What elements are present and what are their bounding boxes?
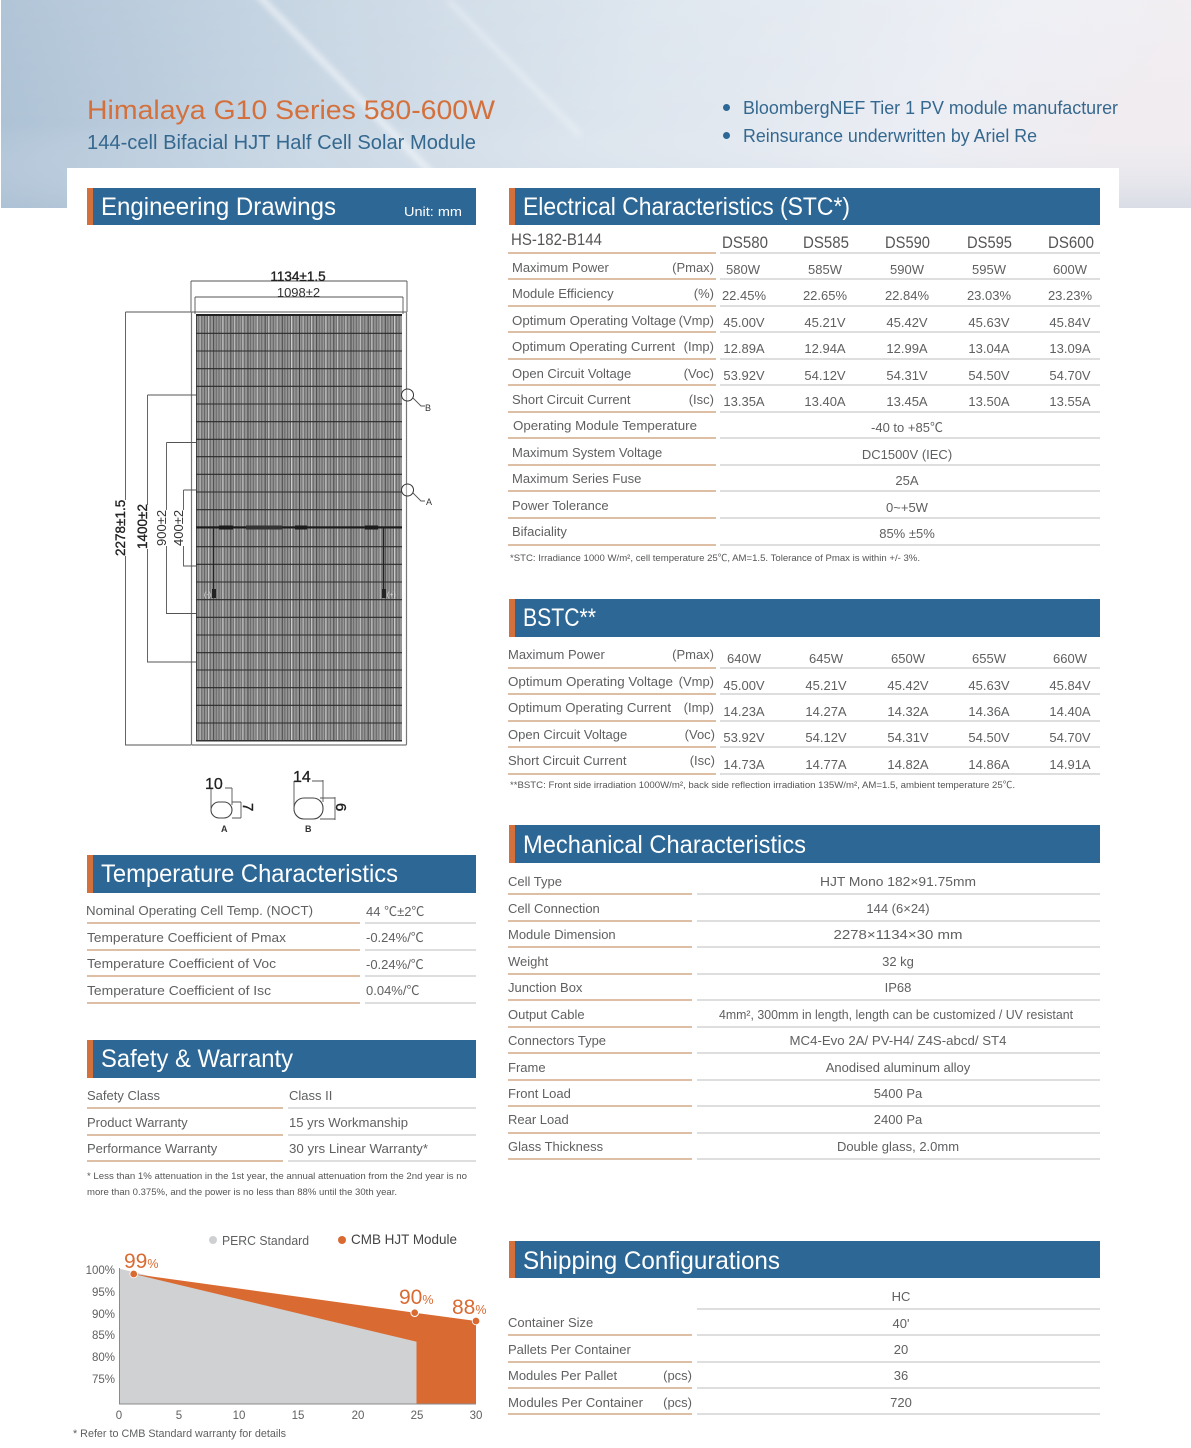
mechanical table — [508, 874, 1100, 1159]
BSTC table: 14.23A — [723, 704, 765, 719]
callouts A and B: A — [426, 497, 432, 507]
drawing: solar module front view — [113, 269, 432, 745]
STC table: 13.04A — [968, 341, 1010, 356]
STC table: 12.99A — [886, 341, 928, 356]
mechanical table: MC4-Evo 2A/ PV-H4/ Z4S-abcd/ ST4 — [790, 1033, 1006, 1048]
chart legend — [209, 1231, 457, 1248]
STC table: 12.89A — [723, 341, 765, 356]
shipping table: 40' — [893, 1316, 909, 1331]
subtitle: 144-cell Bifacial HJT Half Cell Solar Module — [87, 132, 476, 154]
STC table: Maximum System Voltage — [512, 445, 662, 460]
BSTC table: 14.32A — [887, 704, 929, 719]
BSTC table: 45.21V — [805, 678, 847, 693]
STC table: (Imp) — [684, 339, 714, 354]
y axis labels: 75% — [92, 1374, 115, 1386]
dimension: heights: 1400±2 — [135, 504, 150, 549]
panel: mechanical characteristics — [508, 825, 1100, 1159]
STC table: Optimum Operating Voltage — [512, 313, 676, 328]
highlights bullet list: BloombergNEF Tier 1 PV module manufacturer — [743, 98, 1118, 118]
mechanical table: Glass Thickness — [508, 1139, 604, 1154]
BSTC table: 655W — [972, 651, 1007, 666]
BSTC table: 45.00V — [723, 678, 765, 693]
BSTC table: (Voc) — [685, 727, 715, 742]
temperature table: Temperature Coefficient of Voc — [87, 956, 277, 971]
STC table: (%) — [694, 286, 714, 301]
warranty table — [87, 1088, 476, 1161]
STC table: 54.70V — [1049, 368, 1091, 383]
dimension: widths — [191, 269, 407, 314]
temperature table: Temperature Coefficient of Isc — [87, 983, 272, 998]
STC table: 13.35A — [723, 394, 765, 409]
STC table: DC1500V (IEC) — [862, 447, 952, 462]
mechanical table: Cell Connection — [508, 901, 600, 916]
BSTC table: 14.77A — [805, 757, 847, 772]
model header row: HS-182-B144 — [511, 230, 602, 249]
mechanical table: HJT Mono 182×91.75mm — [820, 874, 976, 889]
data point: 99%: 99% — [124, 1250, 158, 1273]
STC table: 53.92V — [723, 368, 765, 383]
model header row: DS590 — [885, 233, 930, 252]
mechanical table: IP68 — [885, 980, 911, 995]
dimension: heights — [113, 312, 196, 745]
BSTC table: 645W — [809, 651, 844, 666]
heading: mechanical characteristics: Mechanical Characteristics — [523, 831, 806, 859]
area: PERC standard — [120, 1269, 416, 1404]
STC table: 13.55A — [1049, 394, 1091, 409]
drawing: mounting hole detail A: 10 — [205, 776, 223, 793]
shipping table: Pallets Per Container — [508, 1342, 632, 1357]
mechanical table: 2400 Pa — [874, 1112, 923, 1127]
temperature table — [86, 903, 476, 1003]
data point: 88%: 88% — [452, 1296, 486, 1319]
warranty footnote — [87, 1171, 467, 1198]
BSTC table: Maximum Power — [508, 647, 605, 662]
STC table: -40 to +85℃ — [871, 420, 943, 435]
warranty table: Safety Class — [87, 1088, 160, 1103]
dimension: heights: 900±2 — [154, 510, 169, 546]
x axis labels: 30 — [470, 1410, 482, 1422]
mechanical table: 32 kg — [882, 954, 914, 969]
title: Himalaya G10 Series 580-600W — [87, 95, 496, 125]
STC table: 0~+5W — [886, 500, 929, 515]
panel: engineering drawings — [87, 188, 476, 834]
STC table: (Isc) — [689, 392, 714, 407]
callouts A and B — [402, 389, 432, 507]
drawing: mounting hole detail B: 6 — [332, 803, 349, 811]
STC table: 13.40A — [804, 394, 846, 409]
BSTC table: Short Circuit Current — [508, 753, 627, 768]
shipping table: Modules Per Pallet — [508, 1368, 617, 1383]
dimension: heights: 400±2 — [171, 510, 186, 546]
chart: warranty degradation — [73, 1231, 486, 1440]
heading: shipping configurations — [509, 1241, 1100, 1278]
BSTC table: (Pmax) — [672, 647, 714, 662]
drawing: mounting hole detail B — [293, 769, 349, 834]
dimension: heights: 2278±1.5 — [113, 500, 128, 556]
STC table: 45.63V — [968, 315, 1010, 330]
BSTC table: Optimum Operating Current — [508, 700, 671, 715]
STC table: 600W — [1053, 262, 1088, 277]
STC table: 12.94A — [804, 341, 846, 356]
heading: mechanical characteristics — [509, 825, 1100, 863]
drawing: mounting hole detail A: A — [221, 824, 228, 834]
temperature table: 0.04%/℃ — [366, 983, 419, 998]
drawing: mounting hole detail B: B — [305, 824, 312, 834]
STC table: 13.50A — [968, 394, 1010, 409]
shipping table: Modules Per Container — [508, 1395, 644, 1410]
heading: engineering drawings: Engineering Drawings — [101, 193, 336, 221]
x axis labels: 15 — [292, 1410, 304, 1422]
STC table: Maximum Series Fuse — [512, 471, 641, 486]
warranty table: Class II — [289, 1088, 332, 1103]
heading: electrical characteristics — [509, 188, 1100, 225]
warranty table: Product Warranty — [87, 1115, 188, 1130]
STC table: Bifaciality — [512, 524, 567, 539]
warranty table: Performance Warranty — [87, 1141, 218, 1156]
x axis labels: 25 — [411, 1410, 423, 1422]
STC table: (Pmax) — [672, 260, 714, 275]
BSTC table: 45.42V — [887, 678, 929, 693]
x axis labels: 20 — [352, 1410, 364, 1422]
mechanical table: 5400 Pa — [874, 1086, 923, 1101]
heading: safety and warranty — [87, 1040, 476, 1078]
BSTC table: 54.70V — [1049, 730, 1091, 745]
warranty table: 30 yrs Linear Warranty* — [289, 1141, 428, 1156]
panel: shipping configurations — [508, 1241, 1100, 1414]
area: CMB HJT module — [134, 1274, 476, 1404]
STC table: 590W — [890, 262, 925, 277]
drawing: mounting hole detail A: 7 — [239, 803, 256, 811]
BSTC table: 45.63V — [968, 678, 1010, 693]
STC table: 580W — [726, 262, 761, 277]
mechanical table: Rear Load — [508, 1112, 569, 1127]
chart axes — [120, 1268, 476, 1404]
model header row: DS585 — [803, 233, 849, 252]
shipping table: Container Size — [508, 1315, 593, 1330]
STC table: 25A — [895, 473, 919, 488]
STC table: 85% ±5% — [879, 526, 935, 541]
y axis labels: 85% — [92, 1330, 115, 1342]
STC table: Operating Module Temperature — [513, 418, 697, 433]
STC table: 45.21V — [804, 315, 846, 330]
header background — [1, 0, 1191, 209]
panel: safety and warranty — [87, 1040, 476, 1198]
BSTC table: 54.31V — [887, 730, 929, 745]
drawing: solar module front view: (-) — [204, 592, 211, 599]
drawing: mounting hole detail B: 14 — [293, 769, 311, 786]
shipping table: 720 — [890, 1395, 912, 1410]
BSTC table: 14.91A — [1049, 757, 1091, 772]
heading: BSTC: BSTC** — [523, 604, 596, 632]
heading: shipping configurations: Shipping Configurations — [523, 1247, 780, 1275]
mechanical table: Cell Type — [508, 874, 562, 889]
heading: temperature characteristics: Temperature Characteristics — [101, 860, 398, 888]
STC table: 22.84% — [885, 288, 929, 303]
mechanical table: Double glass, 2.0mm — [837, 1139, 959, 1154]
STC table: 45.84V — [1049, 315, 1091, 330]
BSTC table: 54.50V — [968, 730, 1010, 745]
mechanical table: 4mm², 300mm in length, length can be customized / UV resistant — [719, 1007, 1073, 1022]
heading: engineering drawings: Unit: mm — [404, 204, 462, 219]
y axis labels: 80% — [92, 1352, 115, 1364]
mechanical table: 144 (6×24) — [866, 901, 930, 916]
STC table: 23.23% — [1048, 288, 1092, 303]
dimension: widths: 1098±2 — [277, 285, 320, 300]
shipping table — [508, 1289, 1100, 1414]
STC table: 23.03% — [967, 288, 1011, 303]
callouts A and B: B — [425, 403, 431, 413]
model header row — [511, 230, 1094, 252]
STC table: 22.45% — [722, 288, 766, 303]
chart legend: PERC Standard — [222, 1233, 309, 1248]
drawing: solar module front view: (+) — [387, 592, 396, 599]
BSTC table: Open Circuit Voltage — [508, 727, 627, 742]
STC footnote: *STC: Irradiance 1000 W/m², cell temperature 25℃, AM=1.5. Tolerance of Pmax is within +/- 3%. — [510, 553, 920, 564]
shipping table: HC — [892, 1289, 910, 1304]
BSTC table: 640W — [727, 651, 762, 666]
mechanical table: 2278×1134×30 mm — [834, 927, 962, 942]
BSTC table: 650W — [891, 651, 926, 666]
model header row: DS600 — [1048, 233, 1094, 252]
mechanical table: Connectors Type — [508, 1033, 606, 1048]
STC table: 54.50V — [968, 368, 1010, 383]
STC table: 595W — [972, 262, 1007, 277]
mechanical table: Anodised aluminum alloy — [826, 1060, 971, 1075]
BSTC table: 14.73A — [723, 757, 765, 772]
STC table: 45.00V — [723, 315, 765, 330]
mechanical table: Module Dimension — [508, 927, 616, 942]
STC table: (Vmp) — [679, 313, 714, 328]
STC table: Maximum Power — [512, 260, 609, 275]
STC table: Module Efficiency — [512, 286, 614, 301]
panel: temperature characteristics — [86, 855, 476, 1003]
shipping table: 36 — [894, 1368, 908, 1383]
highlights bullet list — [723, 98, 1118, 146]
STC table: 13.45A — [886, 394, 928, 409]
mechanical table: Front Load — [508, 1086, 571, 1101]
temperature table: -0.24%/℃ — [366, 957, 424, 972]
highlights bullet list: Reinsurance underwritten by Ariel Re — [743, 126, 1037, 146]
temperature table: Temperature Coefficient of Pmax — [87, 930, 287, 945]
STC table: 54.12V — [804, 368, 846, 383]
mechanical table: Output Cable — [508, 1007, 585, 1022]
chart footnote: * Refer to CMB Standard warranty for details — [73, 1428, 286, 1440]
mechanical table: Weight — [508, 954, 549, 969]
heading: BSTC — [509, 599, 1100, 637]
title block — [87, 95, 496, 154]
STC table: (Voc) — [684, 366, 714, 381]
BSTC table: Optimum Operating Voltage — [508, 674, 673, 689]
STC table: 585W — [808, 262, 843, 277]
dimension: widths: 1134±1.5 — [270, 269, 326, 284]
panel: electrical characteristics STC — [508, 188, 1100, 564]
x axis labels: 5 — [176, 1410, 182, 1422]
STC table: Power Tolerance — [512, 498, 609, 513]
BSTC footnote: **BSTC: Front side irradiation 1000W/m², back side reflection irradiation 135W/m², AM=1.5, ambient temperature 25℃. — [510, 780, 1015, 791]
heading: safety and warranty: Safety & Warranty — [101, 1045, 293, 1073]
STC table: 54.31V — [886, 368, 928, 383]
x axis labels: 0 — [116, 1410, 122, 1422]
STC table: 22.65% — [803, 288, 847, 303]
BSTC table: 660W — [1053, 651, 1088, 666]
STC table: 45.42V — [886, 315, 928, 330]
x axis labels — [116, 1410, 482, 1422]
BSTC table: 14.40A — [1049, 704, 1091, 719]
shipping table: (pcs) — [663, 1368, 692, 1383]
BSTC table: 14.27A — [805, 704, 847, 719]
STC table: Open Circuit Voltage — [512, 366, 631, 381]
STC table: Short Circuit Current — [512, 392, 631, 407]
BSTC table: 53.92V — [723, 730, 765, 745]
STC table — [508, 230, 1100, 545]
model header row: DS580 — [722, 233, 768, 252]
temperature table: -0.24%/℃ — [366, 930, 424, 945]
STC table: Optimum Operating Current — [512, 339, 675, 354]
BSTC table: (Isc) — [690, 753, 715, 768]
mechanical table: Junction Box — [508, 980, 583, 995]
heading: temperature characteristics — [87, 855, 476, 893]
BSTC table: 14.86A — [968, 757, 1010, 772]
BSTC table: 54.12V — [805, 730, 847, 745]
y axis labels — [86, 1265, 115, 1386]
BSTC table: 14.36A — [968, 704, 1010, 719]
BSTC table: 14.82A — [887, 757, 929, 772]
heading: engineering drawings — [87, 188, 476, 225]
BSTC table: 45.84V — [1049, 678, 1091, 693]
BSTC table: (Imp) — [684, 700, 714, 715]
panel: BSTC — [508, 599, 1100, 791]
warranty footnote: * Less than 1% attenuation in the 1st year, the annual attenuation from the 2nd year is no — [87, 1171, 467, 1182]
BSTC table: (Vmp) — [679, 674, 714, 689]
y axis labels: 95% — [92, 1287, 115, 1299]
model header row: DS595 — [967, 233, 1012, 252]
y axis labels: 90% — [92, 1309, 115, 1321]
shipping table: 20 — [894, 1342, 908, 1357]
temperature table: 44 ℃±2℃ — [366, 904, 424, 919]
drawing: mounting hole detail A — [205, 776, 256, 834]
temperature table: Nominal Operating Cell Temp. (NOCT) — [86, 903, 313, 918]
data point: 90%: 90% — [399, 1286, 433, 1309]
chart legend: CMB HJT Module — [351, 1231, 457, 1247]
warranty table: 15 yrs Workmanship — [289, 1115, 408, 1130]
heading: electrical characteristics: Electrical Characteristics (STC*) — [523, 193, 850, 221]
mechanical table: Frame — [508, 1060, 546, 1075]
shipping table: (pcs) — [663, 1395, 692, 1410]
STC table: 13.09A — [1049, 341, 1091, 356]
warranty footnote: more than 0.375%, and the power is no less than 88% until the 30th year. — [87, 1187, 397, 1198]
BSTC table — [508, 647, 1100, 774]
y axis labels: 100% — [86, 1265, 115, 1277]
x axis labels: 10 — [233, 1410, 245, 1422]
